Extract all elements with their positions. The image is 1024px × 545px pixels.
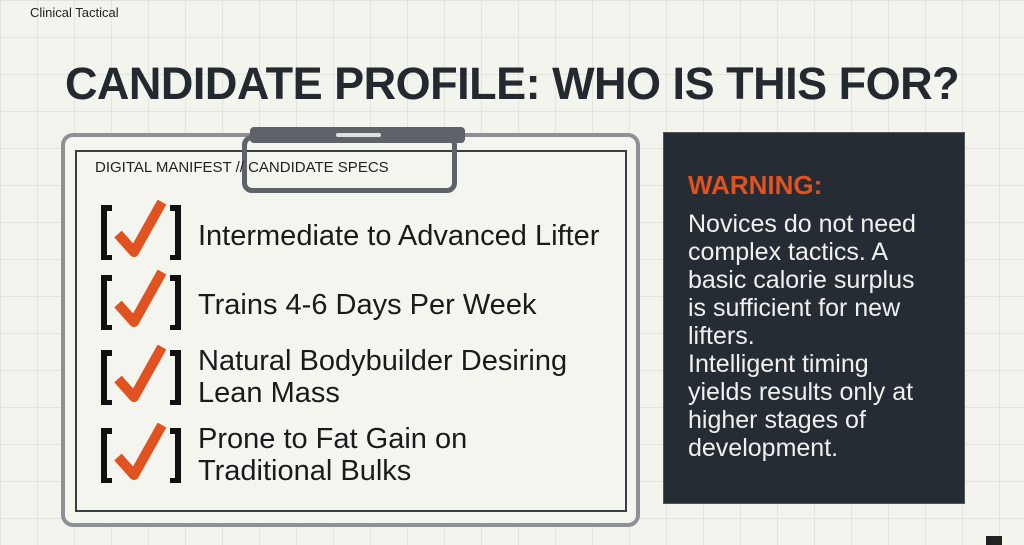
checklist item 4: Prone to Fat Gain on (198, 423, 467, 455)
clipboard frame (61, 133, 640, 527)
checklist item 4: Traditional Bulks (198, 455, 411, 487)
warning text: Intelligent timing yields results only at higher stages of development. (688, 350, 913, 462)
clip (242, 135, 457, 193)
checklist item 1: Intermediate to Advanced Lifter (198, 220, 599, 252)
warning heading: WARNING: (688, 170, 822, 200)
title: CANDIDATE PROFILE: WHO IS THIS FOR? (65, 58, 959, 109)
icon: corner marker (986, 536, 1002, 545)
checklist item 2 (101, 270, 536, 330)
checklist item 3: Natural Bodybuilder Desiring (198, 345, 567, 377)
inner screen (75, 150, 627, 512)
panel: clipboard (61, 127, 640, 527)
checklist item 2: Trains 4-6 Days Per Week (198, 289, 536, 321)
warning text (688, 210, 916, 462)
panel: warning (663, 132, 965, 504)
brand label: Clinical Tactical (30, 5, 119, 20)
checklist item 4 (101, 423, 467, 487)
manifest label: DIGITAL MANIFEST // CANDIDATE SPECS (95, 159, 389, 176)
checklist item 3 (101, 345, 567, 409)
checklist item 3: Lean Mass (198, 377, 340, 409)
checklist item 1 (101, 200, 599, 260)
warning text: Novices do not need complex tactics. A basic calorie surplus is sufficient for new lifters. (688, 210, 916, 350)
